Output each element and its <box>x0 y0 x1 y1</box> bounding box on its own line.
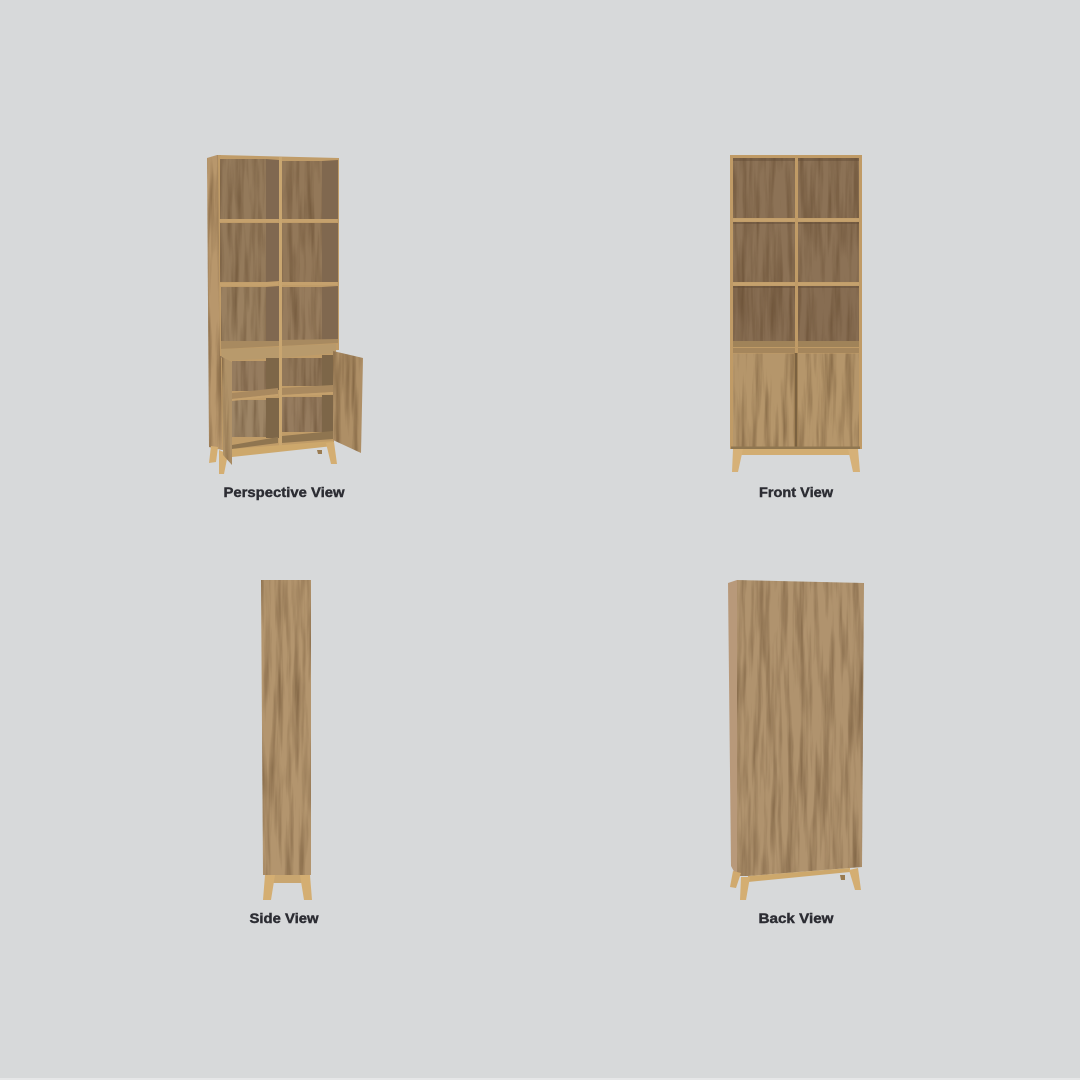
front cabinet bottom <box>731 446 860 449</box>
perspective legs <box>209 442 337 474</box>
perspective lower shelves <box>232 385 333 449</box>
front frame <box>730 155 862 449</box>
front door gap <box>794 353 798 447</box>
label: perspective view: Perspective View <box>224 485 345 500</box>
front base rail <box>734 449 858 455</box>
perspective lower inner sides <box>266 355 333 438</box>
perspective right door <box>333 351 363 453</box>
back rail <box>748 868 850 882</box>
perspective mid shelf tops <box>221 341 279 349</box>
perspective view cabinet <box>207 155 363 474</box>
front shelf shadows <box>733 158 859 288</box>
label: front view: Front View <box>759 485 834 500</box>
perspective centre divider <box>279 157 282 446</box>
front doors <box>733 354 859 446</box>
side legs <box>263 875 275 900</box>
side rail <box>270 875 303 883</box>
perspective upper frame <box>218 155 339 356</box>
side panel <box>261 580 311 875</box>
perspective lower backs <box>232 358 322 437</box>
label: back view: Back View <box>758 911 834 926</box>
perspective left upper inner sides <box>266 159 279 345</box>
label: side view: Side View <box>250 911 319 926</box>
front mid shelf <box>733 341 859 347</box>
front shelves <box>733 218 859 286</box>
perspective right upper backs <box>282 161 322 340</box>
perspective lower body <box>221 351 334 450</box>
back view cabinet <box>728 580 864 900</box>
perspective left door <box>222 357 232 465</box>
back panel <box>737 580 864 876</box>
front rails <box>733 348 859 353</box>
front view cabinet <box>730 155 862 472</box>
perspective left upper backs <box>220 159 266 341</box>
perspective base rail <box>232 441 333 457</box>
bottom edge highlight <box>0 1078 1080 1080</box>
perspective right upper inner sides <box>322 160 338 343</box>
back legs <box>730 871 741 888</box>
front upper backs <box>733 158 859 341</box>
perspective rails <box>221 347 279 361</box>
perspective side panel <box>207 155 222 450</box>
perspective shelves <box>219 219 337 286</box>
back side edge <box>728 580 737 877</box>
side view cabinet <box>261 580 312 900</box>
front legs <box>732 449 743 472</box>
